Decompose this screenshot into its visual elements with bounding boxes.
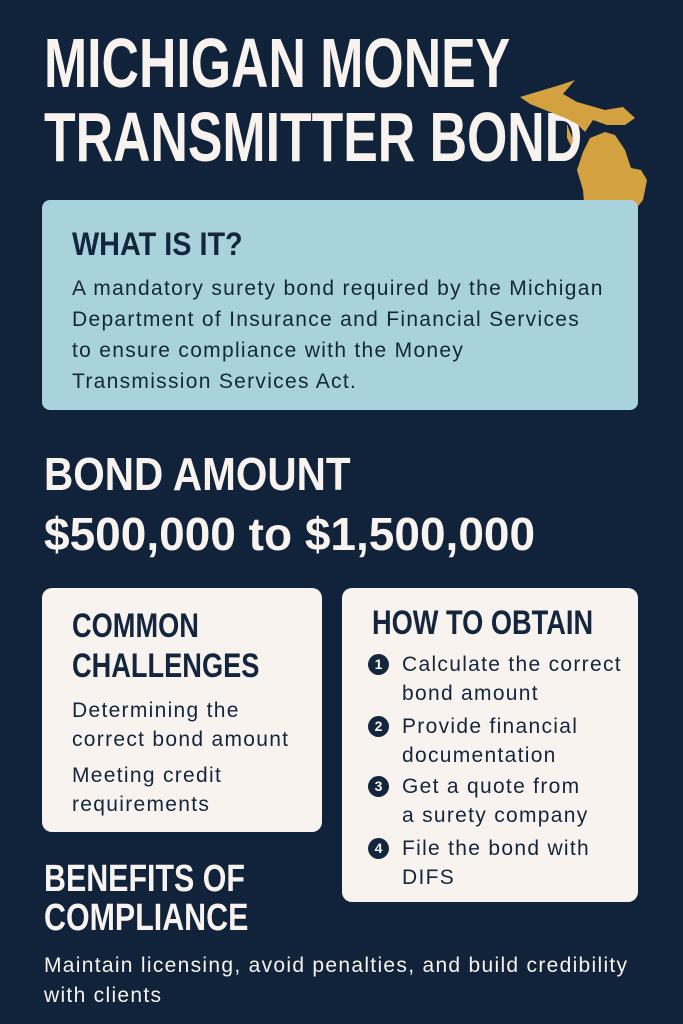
heading: benefits: [44, 858, 248, 939]
heading: benefits: BENEFITS OF: [44, 858, 245, 900]
text: challenges: requirements: [72, 793, 210, 816]
text: challenges: Determining the: [72, 699, 240, 722]
title: [44, 24, 582, 176]
panel: how to obtain: [342, 588, 638, 902]
steps list: DIFS: [402, 866, 455, 889]
text: definition: Department of Insurance and Financial Services: [72, 308, 580, 331]
steps list: Calculate the correct: [402, 653, 622, 676]
heading: amount range: $500,000 to $1,500,000: [44, 508, 535, 560]
title: MICHIGAN MONEY: [44, 24, 510, 102]
steps list: 2: [375, 718, 382, 734]
text: benefits: Maintain licensing, avoid penalties, and build credibility: [44, 954, 628, 977]
text: definition: A mandatory surety bond required by the Michigan: [72, 277, 604, 300]
steps list: 3: [375, 778, 382, 794]
steps list: File the bond with: [402, 837, 590, 860]
text: challenges: [72, 699, 289, 816]
steps list: 4: [375, 840, 382, 856]
heading: benefits: COMPLIANCE: [44, 897, 248, 939]
panel: what is it: [42, 200, 638, 410]
panel: common challenges: [42, 588, 322, 832]
text: benefits: [44, 954, 628, 1007]
title: TRANSMITTER BOND: [44, 98, 582, 176]
heading: common challenges: COMMON: [72, 607, 199, 645]
steps list: Get a quote from: [402, 775, 580, 798]
heading: common challenges: [72, 607, 259, 685]
text: definition: Transmission Services Act.: [72, 370, 357, 393]
text: definition: [72, 277, 604, 393]
steps list: 1: [375, 656, 382, 672]
heading: common challenges: CHALLENGES: [72, 647, 259, 685]
heading: how to obtain: HOW TO OBTAIN: [372, 604, 593, 642]
text: challenges: correct bond amount Meeting credit: [72, 728, 289, 787]
steps list: documentation: [402, 744, 557, 767]
text: definition: to ensure compliance with the Money: [72, 339, 464, 362]
steps list: a surety company: [402, 804, 589, 827]
icon: michigan map: [520, 80, 647, 207]
steps list: [368, 653, 622, 889]
heading: bond amount: BOND AMOUNT: [44, 448, 351, 500]
heading: what is it: WHAT IS IT?: [72, 226, 243, 262]
steps list: Provide financial: [402, 715, 578, 738]
steps list: bond amount: [402, 682, 539, 705]
text: benefits: with clients: [44, 984, 162, 1007]
